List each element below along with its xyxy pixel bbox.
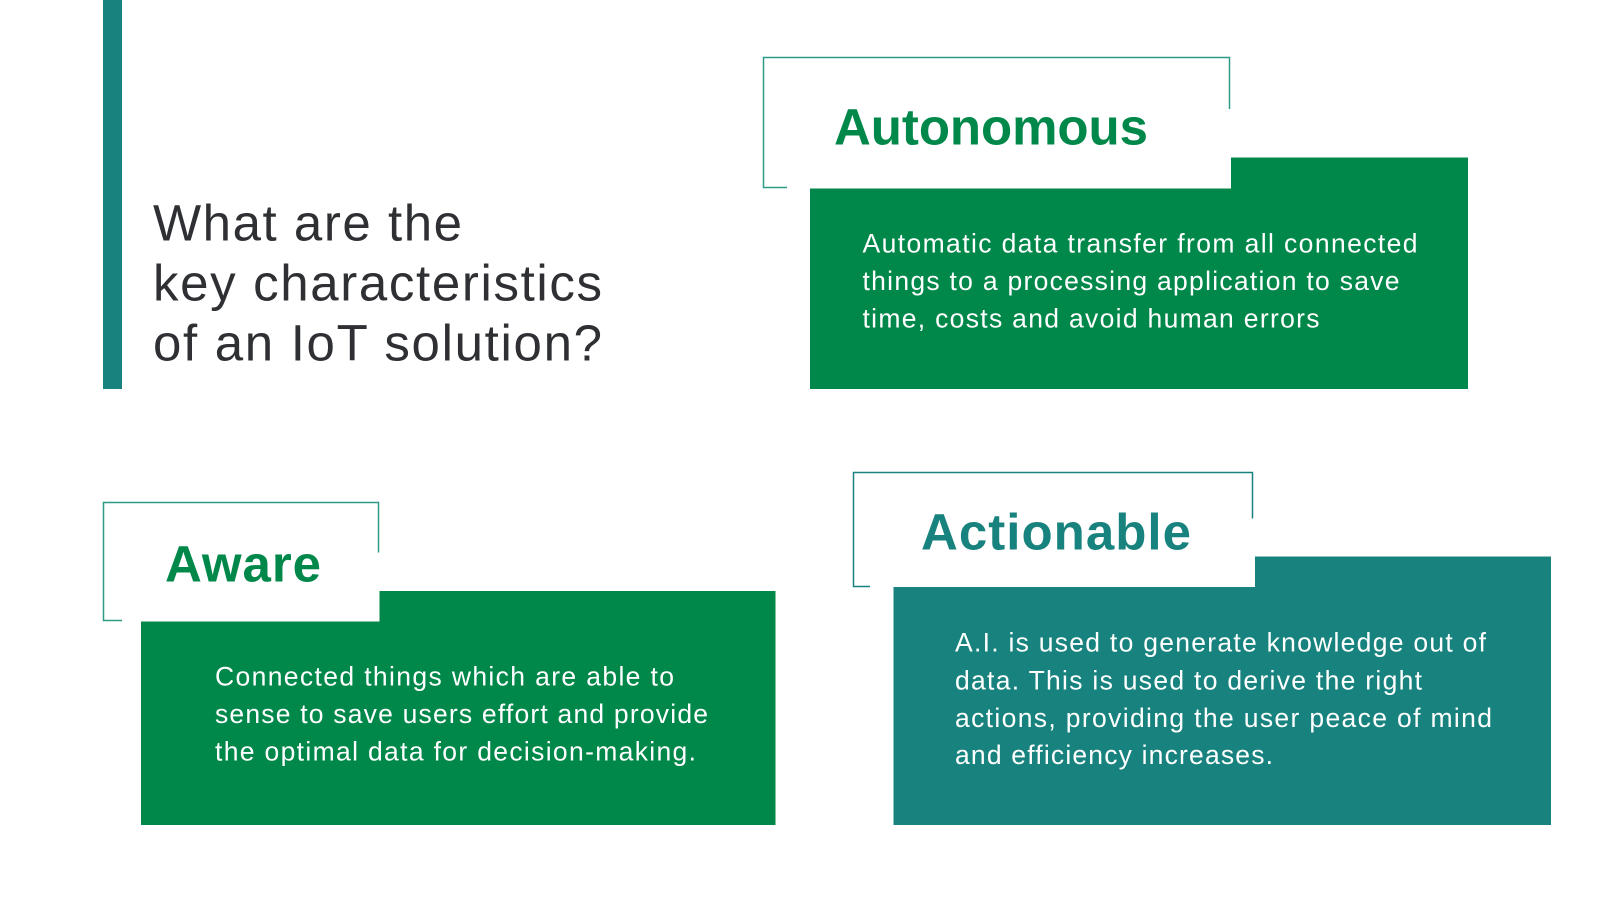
title: What are the: [153, 194, 462, 252]
title: of an IoT solution?: [153, 314, 602, 372]
text: Aware description: [215, 662, 708, 766]
text: Actionable description: [955, 628, 1492, 770]
body box: Aware: [141, 591, 776, 825]
text: Actionable description: A.I. is used to generate knowledge out of: [955, 628, 1487, 658]
text: Aware description: sense to save users effort and provide: [215, 699, 708, 729]
heading: Aware: Aware: [165, 536, 321, 592]
heading frame: Autonomous: [764, 58, 1230, 188]
heading: Actionable: Actionable: [921, 504, 1191, 560]
title: key characteristics: [153, 254, 602, 312]
body box: Actionable: [894, 556, 1551, 825]
text: Autonomous description: [862, 228, 1418, 334]
text: Autonomous description: things to a processing application to save: [862, 266, 1400, 296]
text: Aware description: the optimal data for decision-making.: [215, 736, 696, 766]
accent bar: [103, 0, 122, 389]
body box: Autonomous: [810, 158, 1468, 389]
heading: Autonomous: Autonomous: [834, 98, 1148, 156]
text: Autonomous description: Automatic data transfer from all connected: [862, 228, 1418, 258]
panel: Aware: [104, 502, 776, 825]
title: [153, 194, 602, 372]
text: Aware description: Connected things which are able to: [215, 662, 674, 692]
text: Autonomous description: time, costs and avoid human errors: [862, 304, 1320, 334]
panel: Autonomous: [764, 58, 1468, 389]
text: Actionable description: actions, providing the user peace of mind: [955, 703, 1492, 733]
text: Actionable description: data. This is used to derive the right: [955, 665, 1423, 695]
heading frame: Aware: [104, 502, 378, 620]
panel: Actionable: [854, 472, 1551, 825]
heading frame: Actionable: [854, 472, 1252, 586]
text: Actionable description: and efficiency increases.: [955, 740, 1273, 770]
